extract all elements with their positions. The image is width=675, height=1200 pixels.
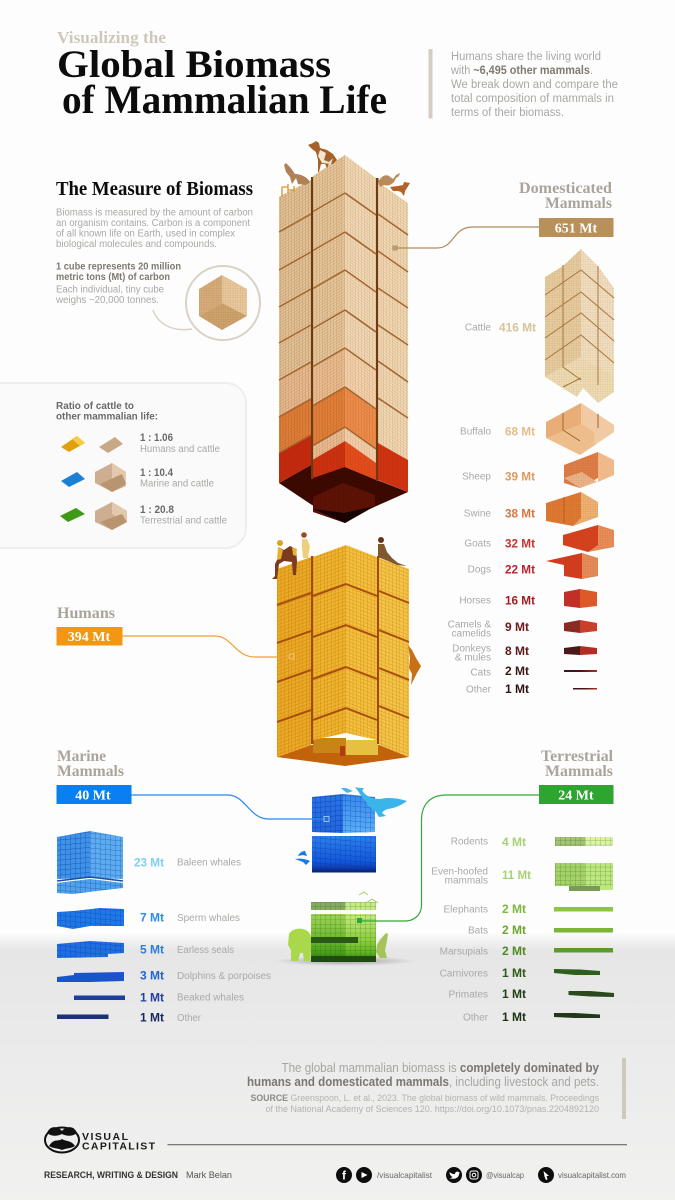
heading: domesticated mammals: Domesticated	[519, 180, 612, 197]
icon: cube in circle	[153, 266, 260, 340]
cube note: weighs ~20,000 tonnes.	[55, 295, 159, 306]
row: baleen whales: 23 Mt	[134, 856, 164, 870]
icon: fish	[341, 788, 353, 793]
panel: ratio of cattle: Ratio of cattle to	[56, 401, 134, 412]
row: beaked whales: 1 Mt	[140, 990, 164, 1004]
row: other: Other	[466, 684, 492, 696]
icon: facebook	[336, 1167, 352, 1183]
row: swine: Swine	[464, 508, 491, 520]
intro text: We break down and compare the	[451, 79, 618, 91]
source: SOURCE Greenspoon, L. et al., 2023. The global biomass of wild mammals. Proceedings	[250, 1093, 600, 1103]
title	[57, 28, 387, 122]
conclusion text	[247, 1058, 626, 1119]
ratio: marine and cattle: 1 : 10.4	[140, 467, 174, 479]
conclusion text: The global mammalian biomass is completely dominated by	[282, 1061, 599, 1075]
row: other	[466, 682, 597, 696]
icon: website cursor	[538, 1167, 554, 1183]
social links: /visualcapitalist	[377, 1170, 433, 1180]
icon: youtube	[356, 1167, 372, 1183]
badge: 24 Mt: 24 Mt	[558, 788, 594, 804]
intro text: Humans share the living world	[451, 51, 601, 63]
row: cattle	[465, 249, 614, 403]
row: dolphins and porpoises	[57, 968, 271, 982]
panel: ratio of cattle	[0, 383, 246, 548]
panel: domesticated breakdown	[448, 249, 614, 696]
row: rodents: 4 Mt	[502, 835, 526, 849]
icon: standing person	[301, 532, 310, 558]
logo: visual capitalist: CAPITALIST	[82, 1140, 156, 1152]
row: sperm whales	[57, 908, 240, 929]
chart: domesticated tower	[279, 141, 410, 523]
source	[250, 1093, 600, 1114]
icon: sitting man	[272, 540, 297, 579]
tower underside	[279, 465, 408, 523]
row: buffalo: 68 Mt	[505, 424, 535, 438]
humans underside	[277, 738, 409, 766]
icon: whale	[355, 787, 407, 817]
row: camels: Camels &	[448, 620, 491, 630]
row: earless seals	[57, 941, 234, 958]
title: Visualizing the	[57, 28, 166, 47]
row: cattle: 416 Mt	[499, 320, 536, 334]
row: horses	[459, 589, 597, 608]
title: of Mammalian Life	[62, 77, 387, 122]
icon: elephant	[288, 929, 311, 961]
icon: golden figures	[282, 184, 294, 197]
connector: marine	[131, 795, 329, 822]
tower middle left	[313, 155, 345, 478]
badge: 651 Mt	[539, 218, 614, 237]
row: beaked whales	[74, 990, 244, 1004]
row: carnivores: 1 Mt	[502, 966, 526, 980]
row: cats	[470, 664, 597, 678]
social links: visualcapitalist.com	[558, 1170, 626, 1180]
humans right column	[379, 558, 409, 757]
badge: 394 Mt: 394 Mt	[68, 630, 111, 645]
row: even-hoofed: mammals	[445, 876, 488, 886]
icon: seated person	[378, 537, 407, 566]
humans middle left	[313, 545, 346, 740]
row: camels	[448, 620, 597, 640]
intro text: with ~6,495 other mammals.	[450, 65, 593, 77]
icon: twitter	[446, 1167, 462, 1183]
badge: 40 Mt	[56, 785, 132, 804]
connector: terrestrial	[357, 795, 539, 923]
row: dogs: 22 Mt	[505, 562, 535, 576]
panel: terrestrial breakdown	[431, 835, 614, 1024]
row: rodents	[451, 835, 613, 849]
cube note: Each individual, tiny cube	[56, 284, 164, 296]
row: marsupials: 2 Mt	[502, 944, 526, 958]
icon: facebook: f	[342, 1168, 347, 1182]
row: dogs	[468, 553, 598, 579]
row: earless seals: Earless seals	[177, 945, 234, 956]
row: horses: 16 Mt	[505, 594, 535, 608]
conclusion text: humans and domesticated mammals, including livestock and pets.	[247, 1075, 599, 1089]
icon: climber	[408, 645, 421, 685]
ratio: terrestrial and cattle	[60, 502, 227, 530]
row: marine other: Other	[177, 1013, 202, 1024]
icon: dog	[390, 182, 410, 196]
row: elephants: 2 Mt	[502, 902, 526, 916]
ratio: humans and cattle: 1 : 1.06	[140, 432, 173, 444]
biomass description: biological molecules and compounds.	[56, 239, 217, 250]
row: baleen whales: Baleen whales	[177, 858, 241, 868]
icon: camel	[378, 173, 400, 187]
chart: terrestrial block	[275, 892, 415, 966]
row: donkeys: Donkeys	[452, 644, 491, 654]
chart: humans tower	[272, 532, 421, 766]
badge: 40 Mt: 40 Mt	[75, 788, 111, 804]
row: horses: Horses	[459, 596, 491, 606]
tower left column	[279, 180, 311, 483]
badge: 24 Mt	[539, 785, 614, 804]
row: swine	[464, 492, 598, 526]
row: terrestrial other: Other	[463, 1012, 489, 1024]
intro text	[428, 49, 618, 119]
row: marsupials	[440, 944, 613, 958]
row: dolphins and porpoises: Dolphins & porpoises	[177, 971, 271, 982]
row: carnivores: Carnivores	[440, 968, 488, 980]
row: dolphins and porpoises: 3 Mt	[140, 968, 164, 982]
heading: domesticated mammals: Mammals	[545, 195, 612, 212]
heading: marine mammals: Mammals	[57, 763, 124, 780]
biomass description	[56, 208, 253, 250]
row: bats: Bats	[468, 926, 488, 936]
icon: cow	[308, 141, 337, 172]
chart: marine block	[312, 794, 376, 872]
heading: terrestrial mammals: Terrestrial	[541, 748, 614, 765]
row: primates: Primates	[449, 990, 488, 1000]
heading: marine mammals	[57, 748, 124, 780]
heading: humans: Humans	[57, 605, 115, 622]
title: Global Biomass	[57, 43, 331, 86]
row: bats	[468, 923, 613, 937]
panel: measure of biomass	[55, 178, 260, 340]
ratio: marine and cattle	[61, 463, 214, 492]
row: goats	[464, 525, 614, 552]
credits: Mark Belan	[186, 1170, 232, 1181]
row: earless seals: 5 Mt	[140, 942, 164, 956]
row: buffalo: Buffalo	[460, 426, 491, 438]
row: even-hoofed: Even-hoofed	[431, 866, 488, 878]
badge: 651 Mt: 651 Mt	[555, 222, 598, 236]
row: other: 1 Mt	[505, 682, 529, 696]
row: marine other: 1 Mt	[140, 1010, 164, 1024]
cube note: metric tons (Mt) of carbon	[56, 272, 170, 283]
source: of the National Academy of Sciences 120. https://doi.org/10.1073/pnas.2204892120	[266, 1104, 599, 1114]
intro text: total composition of mammals in	[451, 93, 614, 105]
panel: ratio of cattle: other mammalian life:	[56, 412, 158, 422]
row: marine other	[57, 1010, 202, 1024]
row: marsupials: Marsupials	[440, 946, 488, 958]
icon: dolphins	[295, 851, 310, 865]
ratio: humans and cattle: Humans and cattle	[140, 444, 220, 455]
row: sperm whales: 7 Mt	[140, 910, 164, 924]
row: buffalo	[460, 403, 614, 455]
row: rodents: Rodents	[451, 836, 488, 848]
credits	[44, 1170, 232, 1181]
row: sperm whales: Sperm whales	[177, 913, 240, 924]
row: bats: 2 Mt	[502, 923, 526, 937]
row: camels: camelids	[452, 628, 491, 640]
social links	[336, 1167, 626, 1183]
icon: instagram	[466, 1167, 482, 1183]
credits: RESEARCH, WRITING & DESIGN	[44, 1170, 178, 1180]
humans middle right	[346, 545, 377, 740]
row: goats: Goats	[464, 538, 491, 550]
row: goats: 32 Mt	[505, 536, 535, 550]
heading: terrestrial mammals	[541, 748, 614, 780]
badge: 394 Mt	[56, 627, 122, 646]
biomass description: Biomass is measured by the amount of carbon	[56, 208, 253, 218]
connector: humans	[122, 636, 294, 659]
panel: marine breakdown	[57, 831, 271, 1024]
row: dogs: Dogs	[468, 564, 491, 576]
cube note: 1 cube represents 20 million	[56, 262, 181, 272]
row: donkeys: 8 Mt	[505, 644, 529, 658]
row: elephants: Elephants	[444, 904, 488, 916]
heading: domesticated mammals	[519, 180, 612, 212]
row: carnivores	[440, 966, 600, 980]
ratio: terrestrial and cattle: 1 : 20.8	[140, 504, 174, 516]
row: elephants	[444, 902, 613, 916]
row: donkeys	[452, 644, 597, 664]
row: primates	[449, 987, 614, 1001]
row: even-hoofed	[431, 863, 613, 891]
heading: marine mammals: Marine	[57, 748, 106, 765]
row: sheep: Sheep	[462, 472, 491, 482]
heading: measure of biomass: The Measure of Biomass	[56, 178, 253, 200]
icon: cat	[284, 163, 310, 185]
tower middle right	[345, 155, 376, 480]
row: primates: 1 Mt	[502, 987, 526, 1001]
biomass description: of all known life on Earth, used in complex	[56, 228, 235, 240]
row: cattle: Cattle	[465, 322, 491, 334]
cube note	[55, 262, 181, 306]
humans left column	[277, 557, 311, 757]
row: even-hoofed: 11 Mt	[502, 868, 531, 882]
biomass description: an organism contains. Carbon is a component	[56, 218, 250, 229]
row: sheep: 39 Mt	[505, 470, 535, 484]
row: baleen whales	[57, 831, 241, 894]
row: cats: Cats	[470, 668, 491, 678]
ratio: terrestrial and cattle: Terrestrial and cattle	[140, 516, 227, 526]
ratio: humans and cattle	[61, 432, 220, 455]
row: terrestrial other	[463, 1010, 600, 1024]
icon: terrestrial animal	[376, 933, 388, 958]
connector: domesticated	[392, 227, 539, 250]
row: swine: 38 Mt	[505, 506, 535, 520]
intro text: terms of their biomass.	[451, 107, 564, 119]
tower right column	[378, 182, 408, 492]
row: sheep	[462, 452, 614, 488]
row: donkeys: & mules	[455, 652, 491, 664]
row: cats: 2 Mt	[505, 664, 529, 678]
heading: terrestrial mammals: Mammals	[545, 763, 613, 780]
logo: visual capitalist	[45, 1127, 156, 1152]
logo: visual capitalist: VISUAL	[82, 1131, 129, 1143]
ratio: marine and cattle: Marine and cattle	[140, 478, 214, 490]
row: beaked whales: Beaked whales	[177, 992, 244, 1004]
row: camels: 9 Mt	[505, 620, 529, 634]
row: terrestrial other: 1 Mt	[502, 1010, 526, 1024]
social links: @visualcap	[486, 1170, 524, 1180]
